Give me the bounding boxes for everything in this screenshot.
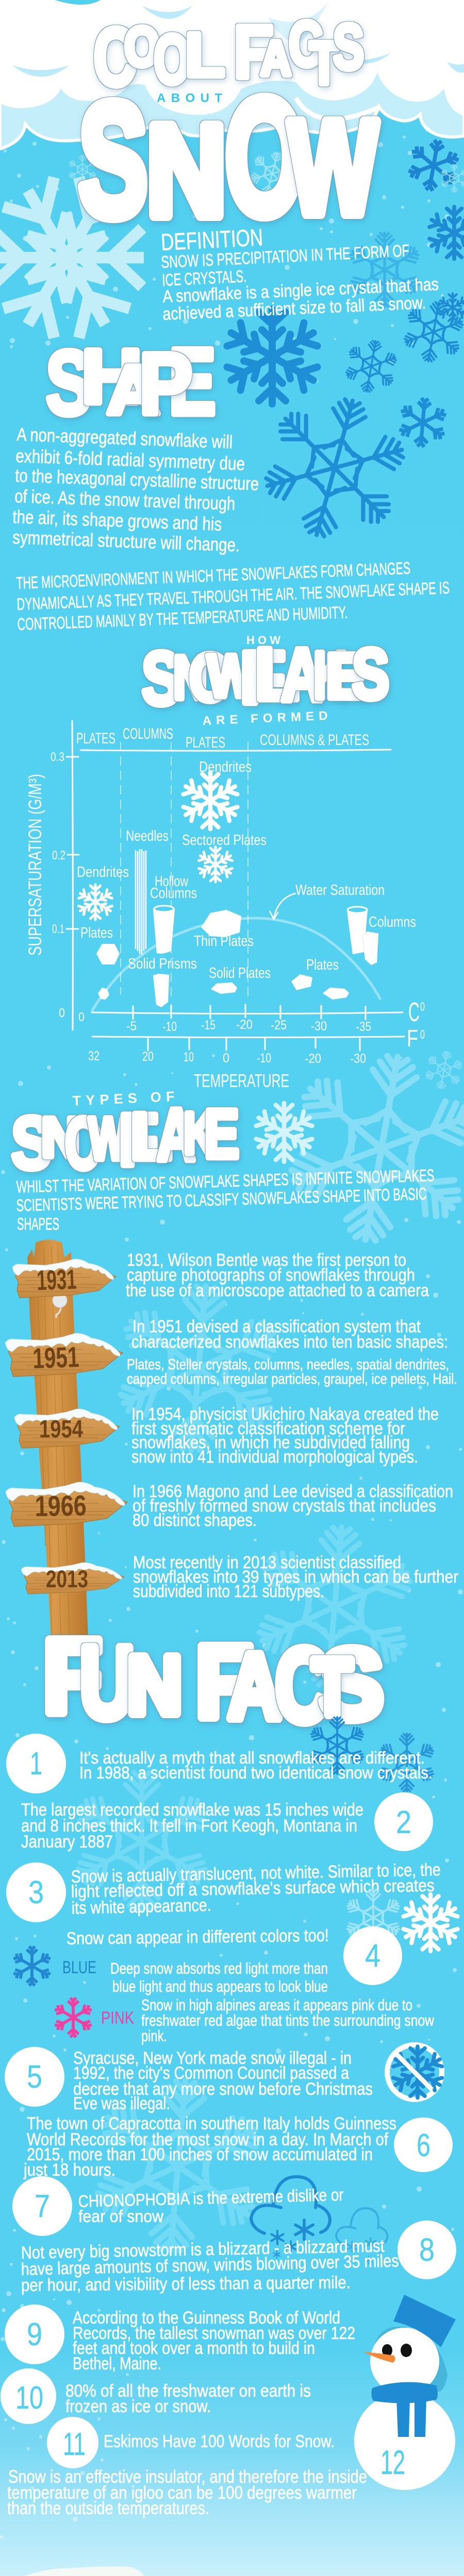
chart column headers: COLUMNS — [123, 725, 173, 742]
subtitle: about: ABOUT — [157, 91, 222, 105]
x axis labels: -30 — [311, 1019, 327, 1033]
icon: snowman with fact 12 number — [354, 2295, 456, 2490]
y axis labels: SUPERSATURATION (G/M³) — [25, 774, 45, 956]
x axis labels: 20 — [142, 1049, 154, 1064]
text block: shape description — [12, 423, 259, 555]
fact 5: Syracuse, New York made snow illegal - in — [73, 2048, 352, 2068]
fact 9: 9 — [27, 2317, 42, 2352]
icon: large pale snowflake top left — [0, 150, 176, 365]
icon: small pale snowflake — [68, 155, 97, 184]
title: snow: O — [225, 64, 305, 250]
heading: types of snowflake — [11, 1089, 239, 1184]
heading: how snowflakes are formed: HOW — [246, 634, 280, 647]
text block: definition — [160, 224, 439, 324]
title: cool facts: C — [93, 11, 136, 104]
fact 5: 1992, the city's Common Council passed a — [73, 2063, 349, 2083]
x axis labels: -25 — [271, 1018, 287, 1032]
fact 6: The town of Capracotta in southern Italy holds Guinness — [27, 2114, 396, 2133]
heading: types of snowflake: A — [157, 1093, 195, 1176]
fact 2: The largest recorded snowflake was 15 inches wide — [21, 1800, 363, 1820]
heading: fun facts: T — [312, 1642, 352, 1732]
fact 11: 11 — [63, 2427, 86, 2462]
chart column headers — [76, 725, 369, 751]
title: cool facts: T — [309, 29, 339, 97]
icon: pale and white snowflakes — [345, 1889, 459, 1951]
fact text: igloo insulator — [7, 2467, 367, 2518]
text block: 2013: Most recently in 2013 scientist classified — [133, 1553, 401, 1572]
fact 9: Records, the tallest snowman was over 122 — [73, 2324, 355, 2343]
heading: types of snowflake: W — [89, 1105, 127, 1172]
heading: types of snowflake: F — [119, 1098, 158, 1181]
title: snow — [78, 64, 378, 250]
fact 8: have large amounts of snow, winds blowing over 35 miles — [21, 2251, 399, 2279]
crystal labels: Columns — [369, 914, 416, 930]
heading: fun facts: C — [275, 1627, 330, 1744]
sign: 2013 — [21, 1563, 124, 1594]
title: cool facts: O — [154, 20, 191, 98]
chart: snowflake formation by temperature and supersaturation — [25, 721, 425, 1091]
sign: 1966: 1966 — [35, 1489, 87, 1522]
text block: types intro: SHAPES — [17, 1214, 59, 1233]
y axis labels: 0 — [59, 1006, 65, 1020]
y axis labels: 0.2 — [52, 849, 65, 862]
text block: shape description: to the hexagonal crystalline structure — [15, 465, 259, 495]
sign: 1954: 1954 — [39, 1416, 83, 1443]
text block: 1951 — [127, 1317, 457, 1387]
crystal labels: Thin Plates — [194, 933, 254, 950]
heading: fun facts: U — [80, 1625, 135, 1739]
x axis labels: 0 — [223, 1051, 229, 1065]
heading: types of snowflake: S — [11, 1101, 52, 1184]
title: snow: W — [289, 93, 378, 242]
fact 4: Snow can appear in different colors too! — [67, 1926, 329, 1948]
heading: shape: A — [107, 352, 160, 429]
fact 3 — [6, 1860, 441, 1922]
fact 2: 2 — [396, 1805, 411, 1840]
text block: shape description: symmetrical structure will change. — [12, 527, 240, 555]
hook with snowball — [53, 1293, 67, 1318]
title: snow: N — [146, 98, 226, 243]
fact 6 — [23, 2114, 453, 2180]
fact 6: just 18 hours. — [23, 2160, 115, 2180]
colour item: blue snow: blue light and thus appears to look blue — [112, 1977, 328, 1995]
fact 5: decree that any more snow before Christmas — [73, 2079, 373, 2099]
fact text: igloo insulator: Snow is an effective insulator, and therefore the inside — [8, 2467, 367, 2487]
heading: how snowflakes are formed: F — [240, 636, 286, 719]
x axis labels: -30 — [350, 1052, 366, 1066]
title: cool facts: F — [234, 10, 274, 94]
text block: 1931 — [126, 1250, 429, 1300]
sign: 2013: 2013 — [46, 1565, 88, 1592]
heading: fun facts: F — [195, 1624, 253, 1739]
fact 3: 3 — [28, 1875, 44, 1910]
title: cool facts: C — [289, 9, 323, 80]
text block: 1954: snowflakes, in which he subdivided falling — [131, 1433, 410, 1452]
y axis labels: 0.3 — [51, 750, 64, 764]
crystal labels: Plates — [306, 957, 339, 973]
heading: how snowflakes are formed: K — [313, 638, 346, 713]
colour item: blue snow: Deep snow absorbs red light more than — [110, 1959, 328, 1977]
fact 3: its white appearance. — [71, 1895, 211, 1918]
water saturation curve — [92, 918, 380, 1011]
heading: how snowflakes are formed: ARE FORMED — [202, 709, 328, 728]
heading: how snowflakes are formed — [142, 633, 389, 728]
x axis labels: -10 — [162, 1020, 177, 1034]
y axis labels: 0 — [78, 1010, 85, 1024]
x axis labels: 0 — [420, 1000, 425, 1014]
sources sign — [0, 2566, 150, 2576]
crystal icons — [78, 772, 378, 1007]
fact 11: Eskimos Have 100 Words for Snow. — [104, 2432, 335, 2451]
fact 1: 1 — [30, 1746, 42, 1782]
text block: 1966: 80 distinct shapes. — [132, 1511, 257, 1530]
icon: blue snowflakes upper right — [348, 136, 464, 322]
fact 6: World Records for the most snow in a day. In March of — [27, 2130, 388, 2149]
icon: pale snowflake beside heading — [255, 1103, 313, 1162]
fact 10 — [1, 2368, 311, 2424]
fact 1 — [6, 1734, 433, 1793]
fact 9: Bethel, Maine. — [73, 2354, 161, 2374]
x axis labels: C — [408, 997, 420, 1027]
x axis labels: TEMPERATURE — [194, 1070, 289, 1091]
text block: types intro — [16, 1165, 435, 1233]
fact 2 — [21, 1792, 433, 1852]
text block: shape description: the air, its shape grows and his — [12, 506, 222, 535]
heading: shape: E — [169, 328, 216, 434]
fact 4: 4 — [365, 1938, 380, 1974]
fact 8 — [21, 2221, 456, 2295]
fact 7 — [12, 2176, 344, 2236]
heading: types of snowflake: TYPES OF — [72, 1089, 175, 1109]
heading: fun facts: N — [127, 1639, 182, 1731]
heading: definition: DEFINITION — [160, 224, 263, 256]
fact 11 — [47, 2417, 335, 2468]
colour item: pink snow: PINK — [101, 2008, 134, 2028]
fact 9: According to the Guinness Book of World — [73, 2308, 340, 2328]
crystal labels: Water Saturation — [295, 882, 385, 899]
x axis labels — [88, 997, 425, 1091]
colour item: blue snow: BLUE — [62, 1958, 96, 1977]
sign: 1966 — [6, 1482, 127, 1527]
heading: how snowflakes are formed: L — [255, 633, 299, 716]
crystal labels: Solid Prisms — [128, 956, 197, 972]
title: snow: S — [78, 69, 148, 250]
arrow: water saturation — [270, 893, 296, 919]
heading: types of snowflake: K — [184, 1101, 214, 1166]
crystal labels: Dendrites — [77, 864, 129, 880]
icon: no snow sign — [385, 2042, 444, 2102]
icon: blizzard clouds — [251, 2177, 388, 2264]
heading: how snowflakes are formed: E — [326, 641, 367, 712]
colour item: pink snow: pink. — [141, 2027, 167, 2045]
icon: faded snowflakes in lower sections — [73, 1041, 464, 2258]
x axis labels: -20 — [236, 1018, 253, 1032]
text block: shape description: of ice. As the snow travel through — [14, 485, 236, 514]
colour item: blue snow — [12, 1946, 328, 1995]
x axis labels: -10 — [257, 1051, 271, 1065]
heading: shape: S — [46, 332, 92, 434]
fact 7: 7 — [35, 2189, 50, 2224]
heading: types of snowflake: O — [65, 1103, 102, 1184]
pole grain — [38, 1247, 70, 1638]
text block: 1951: In 1951 devised a classification system that — [132, 1317, 421, 1336]
fact 2: January 1887 — [21, 1832, 113, 1852]
fact 4 — [67, 1926, 402, 1985]
fact 8: Not every big snowstorm is a blizzard - a blizzard must — [21, 2236, 385, 2263]
chart column headers: COLUMNS & PLATES — [260, 732, 369, 749]
sign: 1931 — [12, 1259, 116, 1298]
text block: definition: ICE CRYSTALS. — [162, 266, 247, 290]
heading: how snowflakes are formed: O — [189, 639, 231, 715]
heading: shape: P — [139, 335, 192, 432]
sign: 1931: 1931 — [36, 1264, 77, 1296]
fact text: igloo insulator: temperature of an igloo can be 100 degrees warmer — [7, 2483, 357, 2503]
x axis labels: -5 — [126, 1019, 137, 1033]
snow cap — [0, 2566, 150, 2576]
title: cool facts: A — [260, 31, 291, 86]
text block: 2013 — [133, 1553, 458, 1601]
crystal labels: Hollow — [155, 873, 189, 890]
x axis labels: F — [407, 1025, 418, 1052]
colour item: pink snow — [54, 1996, 434, 2045]
text block: shape description: A non-aggregated snowflake will — [16, 423, 233, 452]
icon: pale snowflake inside the letter O — [246, 147, 299, 200]
heading: shape — [46, 328, 216, 434]
title: cool facts: S — [333, 12, 364, 83]
text block: 1954 — [131, 1404, 439, 1467]
sign: 1951: 1951 — [32, 1341, 79, 1375]
x axis labels: 10 — [184, 1050, 194, 1064]
title: cool facts: O — [124, 15, 160, 78]
text block: shape description: exhibit 6-fold radial symmetry due — [15, 445, 245, 474]
icon: blue snowflakes near fact 1 — [309, 1717, 435, 1791]
fact 2: and 8 inches thick. It fell in Fort Keogh, Montana in — [21, 1816, 357, 1836]
text block: 2013: subdivided into 121 subtypes. — [133, 1582, 324, 1601]
signpost timeline — [5, 1240, 127, 1640]
fact 8: per hour, and visibility of less than a quarter mile. — [21, 2273, 351, 2295]
x axis labels: 32 — [88, 1049, 100, 1063]
title: cool facts: L — [185, 20, 225, 90]
crystal labels: Sectored Plates — [182, 832, 267, 849]
chart divider lines — [121, 742, 248, 998]
fact 7: fear of snow — [78, 2207, 163, 2226]
fact 9 — [5, 2304, 355, 2374]
clouds header — [0, 0, 464, 149]
heading: how snowflakes are formed: S — [352, 634, 389, 714]
fact 9: feet and took over a month to build in — [73, 2338, 315, 2358]
sign: 1951 — [5, 1333, 123, 1377]
heading: types of snowflake: E — [204, 1096, 239, 1173]
heading: how snowflakes are formed: N — [173, 643, 207, 712]
heading: fun facts: F — [43, 1617, 102, 1735]
crystal labels — [77, 759, 416, 981]
heading: fun facts: A — [228, 1635, 281, 1738]
text block: microenvironment — [16, 558, 450, 634]
fact 5: Eve was illegal. — [73, 2094, 170, 2113]
sign: 1954 — [14, 1409, 120, 1448]
fact 6: 2015, more than 100 inches of snow accumulated in — [27, 2145, 373, 2164]
x axis labels: -15 — [201, 1018, 216, 1032]
crystal labels: Solid Plates — [209, 965, 271, 981]
chart column headers: PLATES — [76, 730, 115, 747]
fact text: igloo insulator: than the outside temperatures. — [7, 2498, 209, 2518]
y axis labels: 0.1 — [52, 922, 64, 936]
fact 7: CHIONOPHOBIA is the extreme dislike or — [78, 2185, 344, 2211]
fact 1: It's actually a myth that all snowflakes are different. — [79, 1748, 425, 1767]
x axis labels: -35 — [356, 1020, 371, 1034]
heading: fun facts — [43, 1617, 384, 1744]
fact 10: frozen as ice or snow. — [65, 2397, 211, 2416]
chart axes — [67, 721, 404, 1050]
fact 5: 5 — [27, 2059, 42, 2095]
text block: 1966 — [132, 1482, 453, 1530]
y axis labels — [25, 750, 85, 1024]
signpost pole — [27, 1240, 88, 1640]
text block: 1954: snow into 41 individual morphological types. — [131, 1447, 418, 1467]
title: cool facts — [93, 9, 364, 104]
icon: snowflake cluster beside shape section — [224, 297, 464, 553]
chart column headers: PLATES — [186, 734, 225, 751]
text block: 1954: first systematic classification scheme for — [131, 1419, 405, 1438]
heading: fun facts: S — [320, 1628, 384, 1740]
fact 10: 10 — [15, 2380, 43, 2416]
fact 6: 6 — [417, 2128, 430, 2163]
crystal labels: Plates — [80, 925, 113, 941]
text block: 1931: capture photographs of snowflakes through — [127, 1265, 415, 1285]
heading: how snowflakes are formed: A — [281, 633, 323, 717]
crystal labels: Columns — [150, 885, 197, 902]
crystal labels: Needles — [126, 828, 169, 844]
fact 10: 80% of all the freshwater on earth is — [65, 2381, 311, 2401]
heading: how snowflakes are formed: S — [142, 636, 180, 720]
x axis labels: 0 — [420, 1028, 425, 1042]
heading: how snowflakes are formed: W — [207, 642, 255, 709]
crystal labels: Dendrites — [199, 759, 252, 775]
heading: types of snowflake: L — [130, 1099, 172, 1174]
icon: snowman with fact 12 number: 12 — [380, 2443, 405, 2481]
fact 5 — [5, 2047, 373, 2113]
text block: 1931: 1931, Wilson Bentle was the first person to — [127, 1250, 406, 1270]
fact 8: 8 — [419, 2232, 435, 2268]
heading: types of snowflake: N — [41, 1106, 80, 1169]
heading: shape: H — [81, 333, 142, 419]
x axis labels: -20 — [305, 1052, 321, 1066]
